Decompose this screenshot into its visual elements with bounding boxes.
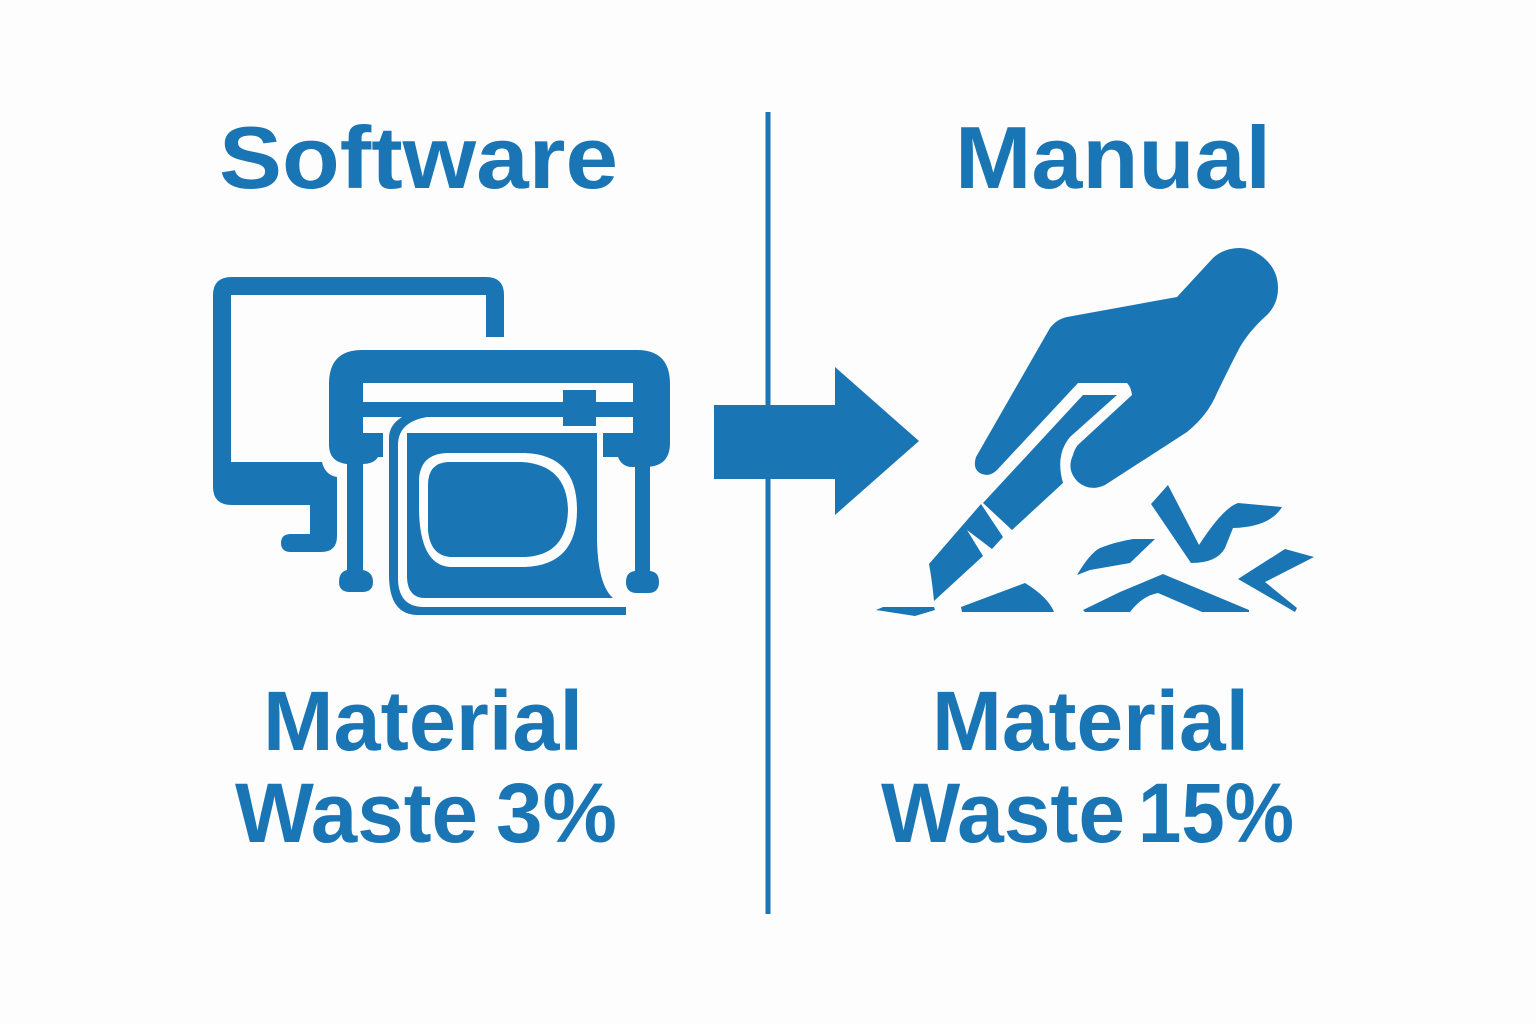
- label: software waste: [235, 674, 617, 860]
- label: manual waste: 15%: [1138, 766, 1294, 860]
- paper sheet: [407, 433, 613, 598]
- label: manual waste: Waste: [881, 766, 1125, 860]
- heading: Manual: Manual: [955, 108, 1271, 207]
- label: manual waste: [881, 674, 1294, 860]
- sheet centre: [428, 462, 568, 557]
- center divider: [766, 112, 770, 914]
- arrow: [714, 367, 919, 515]
- plotter legs: [339, 460, 659, 593]
- heading: Software: Software: [219, 108, 618, 207]
- sheet ring: [419, 453, 577, 567]
- label: software waste: 3%: [496, 766, 617, 860]
- plotter slots: [363, 383, 633, 433]
- scrap 4: [1083, 574, 1249, 612]
- knife handle: [983, 395, 1117, 530]
- scrap 3: [1077, 539, 1155, 575]
- label: manual waste: Material: [932, 674, 1249, 768]
- scrap 5: [1151, 485, 1282, 563]
- monitor: [213, 277, 504, 552]
- paper outline: [389, 417, 626, 615]
- scrap 1: [876, 607, 935, 616]
- label: software waste: Waste: [235, 766, 478, 860]
- scrap 2: [961, 583, 1054, 612]
- plotter body: [329, 350, 670, 467]
- carriage: [563, 390, 596, 426]
- knife blade: [929, 504, 1003, 601]
- hand: [975, 248, 1278, 488]
- scrap 6: [1238, 549, 1314, 612]
- icon: monitor and plotter: [213, 277, 670, 615]
- label: software waste: Material: [263, 674, 583, 768]
- icon: hand with craft knife cutting scraps: [876, 248, 1314, 616]
